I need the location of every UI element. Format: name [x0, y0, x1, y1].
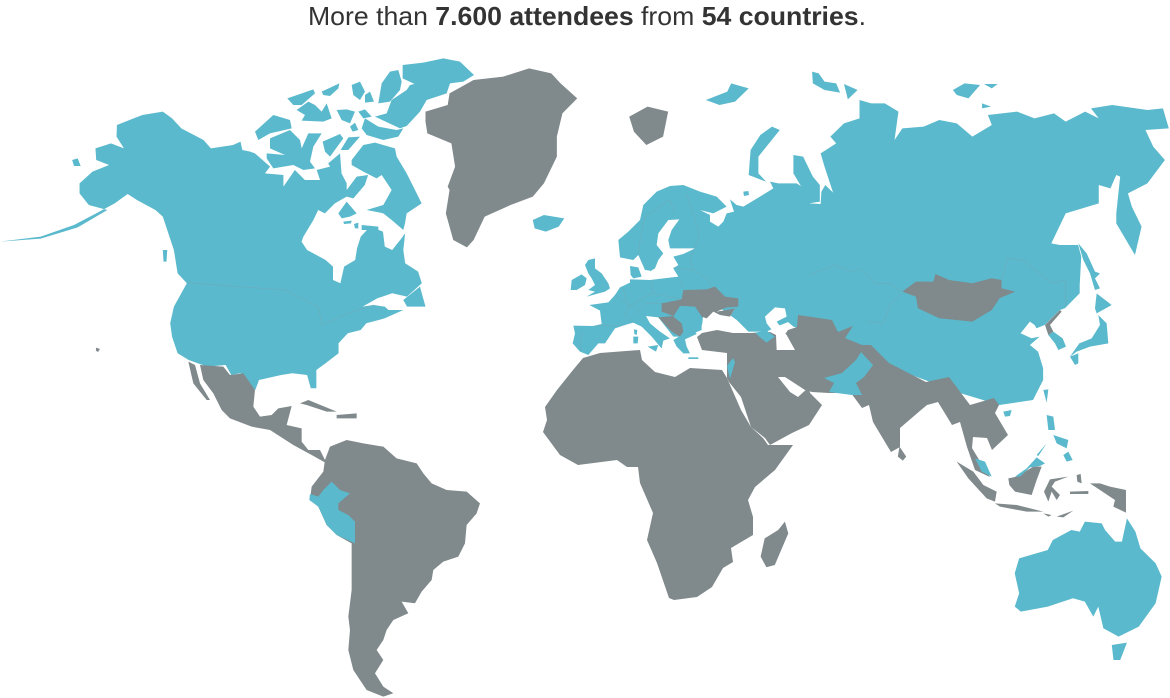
border: USA and Canada — [187, 283, 374, 325]
map region: Russia, Kazakhstan and China (attending, teal) — [754, 100, 1169, 405]
map region: North Korea, South Korea and Japan — [1045, 243, 1112, 365]
map region: Madagascar and Sri Lanka — [761, 447, 906, 567]
map region: Europe internal borders — [580, 193, 713, 352]
border lines: Kazakhstan and China — [762, 265, 902, 300]
map region: Southeast Asia islands — [957, 389, 1126, 517]
map region: Greenland — [426, 68, 577, 247]
map region: Caucasus — [755, 331, 775, 343]
map region: Africa — [543, 350, 793, 600]
map region: Canadian Arctic islands — [255, 58, 474, 230]
map region: Mongolia — [902, 274, 1015, 322]
water: Caspian Sea — [765, 307, 795, 350]
map region: Arctic islands of Eurasia — [629, 72, 998, 182]
map region: Pakistan — [824, 352, 873, 395]
water: Baltic Sea — [647, 219, 695, 280]
map region: North America mainland (attending, teal) — [0, 112, 426, 390]
title: More than 7.600 attendees from 54 countries. — [308, 1, 866, 31]
map region: Australia and Tasmania — [1015, 518, 1162, 660]
map region: Israel — [727, 358, 735, 379]
map region: Peru — [309, 482, 355, 543]
map region: Romania and Bulgaria — [674, 306, 702, 334]
map region: Hawaii — [96, 348, 100, 352]
map region: Iceland — [533, 215, 564, 232]
water: Black Sea — [702, 308, 748, 334]
map region: South America — [310, 440, 480, 697]
map region: Europe and western Russia (attending, teal) — [571, 182, 810, 359]
map region: Middle East and South Asia — [697, 315, 1008, 477]
map region: Ukraine, Hungary and Serbia (not attending, grey) — [658, 287, 738, 337]
map region: Greece — [673, 332, 697, 353]
map region: Mexico and Central America — [188, 362, 357, 463]
